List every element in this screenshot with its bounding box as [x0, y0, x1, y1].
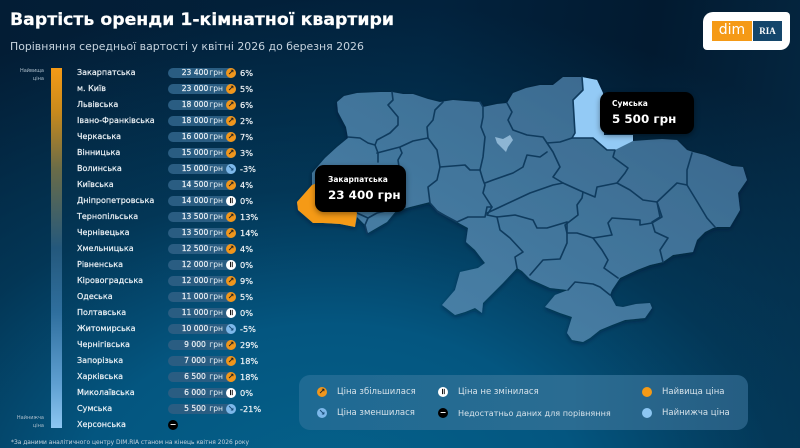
row: Кіровоградська: 9%	[240, 276, 253, 286]
row: Закарпатська	[77, 68, 253, 78]
row: Волинська	[77, 164, 256, 174]
row: м. Київ	[77, 84, 253, 94]
row: Тернопільська: Тернопільська	[77, 212, 138, 221]
row: Волинська: Волинська	[77, 164, 122, 173]
row: Чернівецька: грн	[209, 228, 223, 237]
legend: not enough data: −	[440, 408, 446, 417]
footnote: *За даними аналітичного центру DIM.RIA станом на кінець квітня 2026 року	[11, 440, 249, 446]
row: Закарпатська: Закарпатська	[77, 68, 135, 77]
row: Львівська: ↗	[228, 100, 234, 109]
row: м. Київ: ↗	[228, 84, 234, 93]
row: Івано-Франківська: Івано-Франківська	[77, 116, 155, 125]
row: Чернігівська: ↗	[228, 340, 234, 349]
row: Миколаївська: ॥	[229, 388, 233, 397]
row: Київська: грн	[209, 180, 223, 189]
logo: dim.ria: RIA	[759, 26, 776, 36]
scale label: lowest price: ціна	[33, 423, 44, 429]
row: Волинська: 15 000	[182, 164, 208, 173]
row: Херсонська	[77, 420, 178, 430]
row: Хмельницька: ↗	[228, 244, 234, 253]
price scale bar	[51, 68, 62, 428]
row: м. Київ: 5%	[240, 84, 253, 94]
row: Київська: 4%	[240, 180, 253, 190]
logo: dim.ria	[703, 12, 790, 50]
row: Полтавська: Полтавська	[77, 308, 126, 317]
row: Вінницька: Вінницька	[77, 148, 120, 157]
row: Сумська: ↘	[228, 404, 234, 413]
row: Миколаївська: 0%	[240, 388, 253, 398]
row: Сумська: -21%	[240, 404, 261, 414]
scale label: highest price: ціна	[33, 76, 44, 82]
row: м. Київ: м. Київ	[77, 84, 106, 93]
row: Тернопільська	[76, 212, 258, 222]
row: Житомирська: грн	[209, 324, 223, 333]
row: Кіровоградська: 12 000	[182, 276, 208, 285]
row: Запорізька: 18%	[240, 356, 258, 366]
row: Чернігівська: 9 000	[184, 340, 206, 349]
row: Полтавська: ॥	[229, 308, 233, 317]
row: Рівненська: грн	[209, 260, 223, 269]
row: Херсонська: −	[170, 420, 176, 429]
row: Житомирська: ↘	[228, 324, 234, 333]
callout: Закарпатська: Закарпатська	[328, 175, 388, 184]
row: Полтавська: грн	[209, 308, 223, 317]
row: Рівненська: 12 000	[182, 260, 208, 269]
legend: price increased: ↗	[319, 387, 325, 396]
row: Вінницька	[77, 148, 253, 158]
map: Zakarpattia oblast highlighted	[297, 180, 357, 227]
row: Харківська: 6 500	[184, 372, 206, 381]
row: Рівненська	[77, 260, 253, 270]
row: Черкаська	[77, 132, 253, 142]
row: Закарпатська: 6%	[240, 68, 253, 78]
row: Дніпропетровська: грн	[209, 196, 223, 205]
row: Харківська: грн	[209, 372, 223, 381]
map: Sumy oblast highlighted	[572, 77, 633, 150]
row: м. Київ: грн	[209, 84, 223, 93]
legend: not enough data: Недостатньо даних для порівняння	[458, 408, 611, 418]
row: Чернівецька: 14%	[240, 228, 258, 238]
row: Харківська: ↗	[228, 372, 234, 381]
row: Хмельницька: 12 500	[182, 244, 208, 253]
scale label: lowest price: Найнижча	[17, 415, 44, 421]
row: Київська: ↗	[228, 180, 234, 189]
legend: price increased: Ціна збільшилася	[337, 387, 416, 397]
row: Одеська: грн	[209, 292, 223, 301]
row: Полтавська: 11 000	[182, 308, 208, 317]
row: Закарпатська: ↗	[228, 68, 234, 77]
row: Закарпатська: 23 400	[182, 68, 208, 77]
row: Тернопільська: 13 500	[182, 212, 208, 221]
region ranking list	[76, 68, 261, 430]
row: Харківська: Харківська	[77, 372, 123, 381]
row: Запорізька: Запорізька	[77, 356, 123, 365]
row: Чернівецька: Чернівецька	[77, 228, 129, 237]
row: Одеська: 5%	[240, 292, 253, 302]
row: Херсонська: Херсонська	[77, 420, 126, 429]
row: Львівська	[77, 100, 253, 110]
row: Закарпатська: грн	[209, 68, 223, 77]
row: Тернопільська: 13%	[240, 212, 258, 222]
callout: Закарпатська	[315, 165, 406, 212]
row: Тернопільська: грн	[209, 212, 223, 221]
row: Івано-Франківська: грн	[209, 116, 223, 125]
row: Одеська: 11 000	[182, 292, 208, 301]
row: Вінницька: грн	[209, 148, 223, 157]
row: Запорізька: 7 000	[184, 356, 206, 365]
row: Волинська: ↘	[228, 164, 234, 173]
legend: lowest price: Найнижча ціна	[662, 408, 730, 418]
row: Волинська: -3%	[240, 164, 256, 174]
row: м. Київ: 23 000	[182, 84, 208, 93]
row: Одеська: ↗	[228, 292, 234, 301]
row: Харківська	[77, 372, 258, 382]
row: Рівненська: ॥	[229, 260, 233, 269]
callout: Закарпатська: 23 400 грн	[328, 188, 401, 202]
row: Запорізька: грн	[209, 356, 223, 365]
row: Кіровоградська: грн	[209, 276, 223, 285]
row: Львівська: грн	[209, 100, 223, 109]
subtitle: Порівняння середньої вартості у квітні 2026 до березня 2026	[10, 40, 364, 53]
row: Харківська: 18%	[240, 372, 258, 382]
row: Дніпропетровська	[77, 196, 253, 206]
row: Запорізька: ↗	[228, 356, 234, 365]
callout: Сумська	[600, 92, 694, 134]
row: Дніпропетровська: 0%	[240, 196, 253, 206]
row: Івано-Франківська	[77, 116, 253, 126]
row: Рівненська: Рівненська	[77, 260, 123, 269]
row: Одеська: Одеська	[77, 292, 113, 301]
row: Чернівецька	[77, 228, 258, 238]
row: Чернігівська: грн	[209, 340, 223, 349]
legend panel	[299, 375, 748, 430]
row: Одеська	[77, 292, 253, 302]
legend: price decreased: ↘	[319, 408, 325, 417]
row: Вінницька: 15 000	[182, 148, 208, 157]
row: Івано-Франківська: 2%	[240, 116, 253, 126]
row: Київська: 14 500	[182, 180, 208, 189]
row: Миколаївська: 6 000	[184, 388, 206, 397]
row: Черкаська: 16 000	[182, 132, 208, 141]
scale label: highest price	[20, 68, 44, 82]
row: Миколаївська: грн	[209, 388, 223, 397]
row: Дніпропетровська: ॥	[229, 196, 233, 205]
row: Сумська: Сумська	[77, 404, 112, 413]
row: Львівська: 6%	[240, 100, 253, 110]
callout: Сумська: 5 500 грн	[612, 112, 676, 126]
row: Сумська: грн	[209, 404, 223, 413]
row: Дніпропетровська: 14 000	[182, 196, 208, 205]
row: Житомирська	[77, 324, 256, 334]
row: Хмельницька: грн	[209, 244, 223, 253]
row: Львівська: Львівська	[77, 100, 118, 109]
map: Kyiv city	[495, 135, 513, 152]
row: Житомирська: 10 000	[182, 324, 208, 333]
row: Сумська: 5 500	[184, 404, 206, 413]
callout: Сумська: Сумська	[612, 99, 648, 108]
row: Чернівецька: ↗	[228, 228, 234, 237]
row: Кіровоградська	[77, 276, 253, 286]
row: Миколаївська	[77, 388, 253, 398]
row: Черкаська: ↗	[228, 132, 234, 141]
row: Чернігівська: 29%	[240, 340, 258, 350]
row: Київська: Київська	[77, 180, 114, 189]
row: Вінницька: 3%	[240, 148, 253, 158]
row: Кіровоградська: ↗	[228, 276, 234, 285]
row: Житомирська: -5%	[240, 324, 256, 334]
map: oblast borders	[348, 77, 715, 295]
row: Черкаська: Черкаська	[77, 132, 121, 141]
row: Львівська: 18 000	[182, 100, 208, 109]
row: Київська	[77, 180, 253, 190]
row: Чернівецька: 13 500	[182, 228, 208, 237]
scale label: highest price: Найвища	[20, 68, 44, 74]
row: Волинська: грн	[209, 164, 223, 173]
row: Чернігівська: Чернігівська	[77, 340, 130, 349]
row: Полтавська: 0%	[240, 308, 253, 318]
row: Вінницька: ↗	[228, 148, 234, 157]
row: Рівненська: 0%	[240, 260, 253, 270]
row: Черкаська: 7%	[240, 132, 253, 142]
row: Хмельницька: Хмельницька	[77, 244, 134, 253]
legend: price decreased: Ціна зменшилася	[337, 408, 415, 418]
row: Миколаївська: Миколаївська	[77, 388, 135, 397]
legend: price unchanged: ॥	[441, 387, 445, 396]
row: Сумська	[77, 404, 261, 414]
row: Черкаська: грн	[209, 132, 223, 141]
row: Кіровоградська: Кіровоградська	[77, 276, 143, 285]
logo: dim.ria: dim	[719, 22, 745, 38]
row: Житомирська: Житомирська	[77, 324, 136, 333]
row: Запорізька	[77, 356, 258, 366]
row: Івано-Франківська: ↗	[228, 116, 234, 125]
row: Полтавська	[77, 308, 253, 318]
scale label: lowest price	[17, 415, 44, 429]
legend: price unchanged: Ціна не змінилася	[458, 387, 539, 397]
row: Хмельницька	[77, 244, 253, 254]
row: Чернігівська	[77, 340, 258, 350]
legend: highest price: Найвища ціна	[662, 387, 724, 397]
row: Івано-Франківська: 18 000	[182, 116, 208, 125]
row: Дніпропетровська: Дніпропетровська	[77, 196, 154, 205]
row: Тернопільська: ↗	[228, 212, 234, 221]
map: country silhouette	[297, 77, 747, 342]
title: Вартість оренди 1-кімнатної квартири	[10, 10, 394, 30]
row: Хмельницька: 4%	[240, 244, 253, 254]
